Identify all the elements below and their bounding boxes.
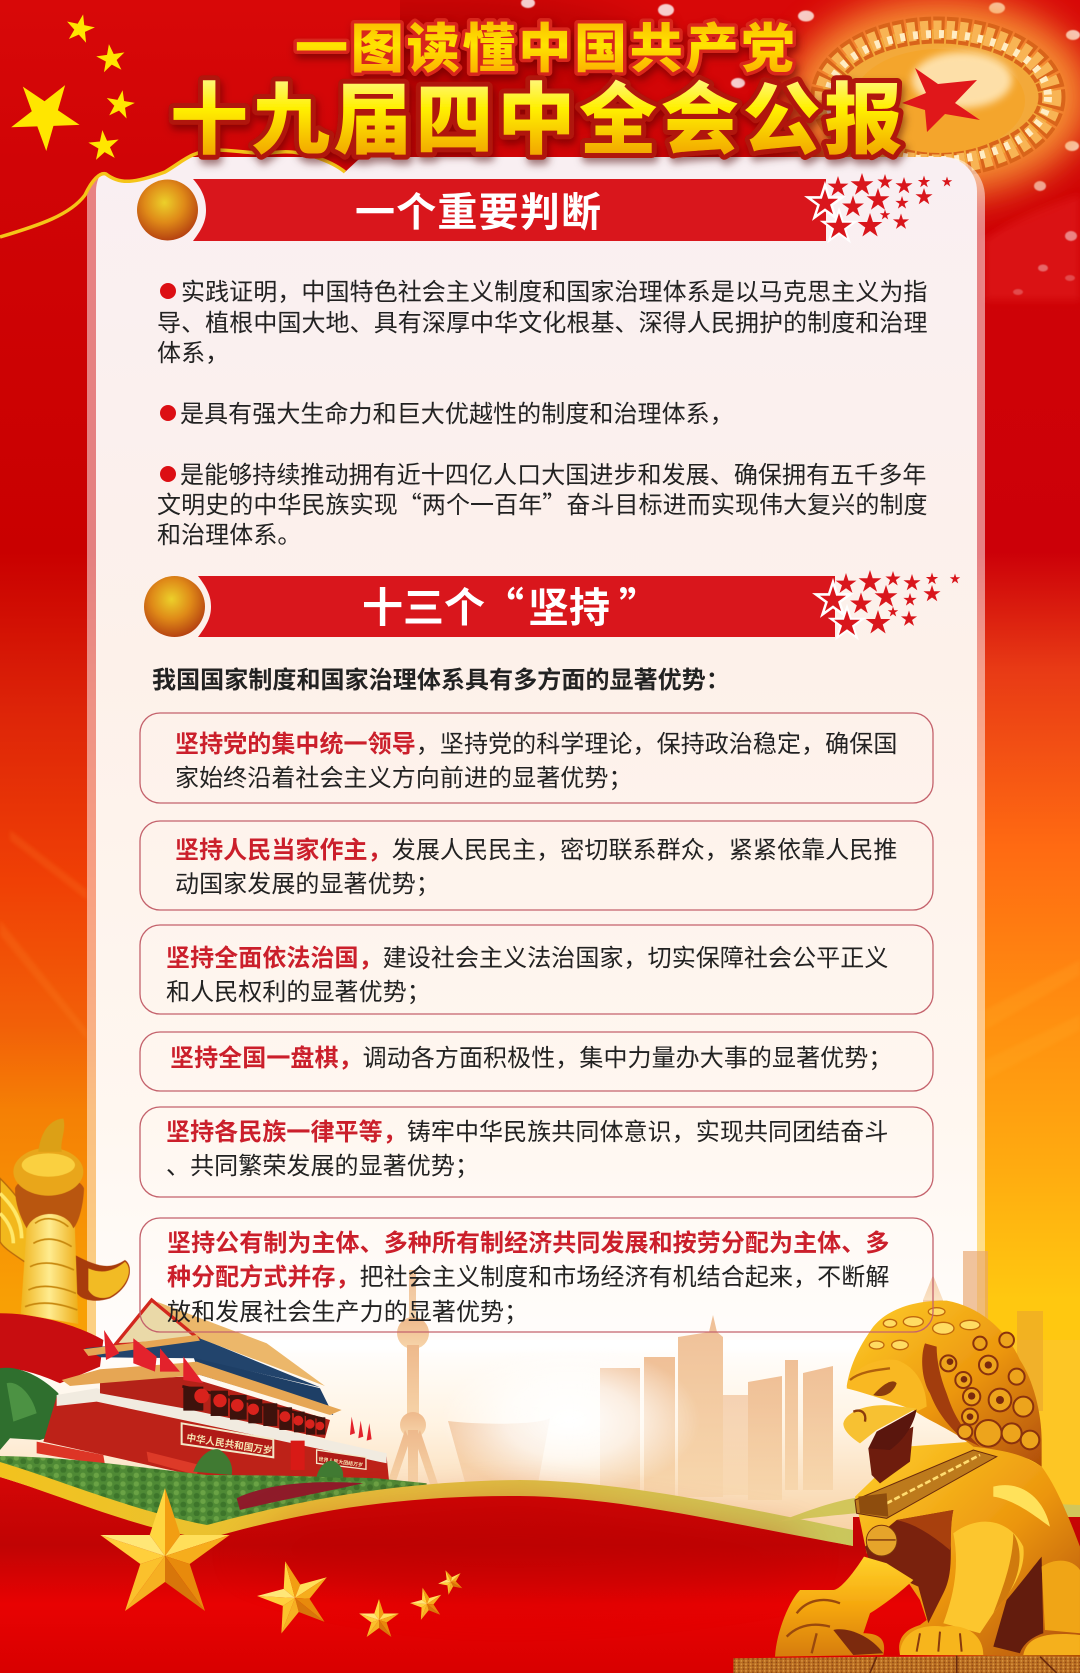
red wave ground with gold ribbon (0, 1462, 1080, 1673)
tv tower (385, 1270, 440, 1490)
text block: judgement paragraphs: 导、植根中国大地、具有深厚中华文化根基、深得人民拥护的制度和治理 (157, 303, 928, 338)
flags (104, 1330, 372, 1441)
icon: national emblem ring with red star (790, 0, 1080, 195)
city skyline silhouette (385, 1251, 1043, 1500)
card: ethnic equality: 、共同繁荣发展的显著优势； (166, 1146, 479, 1181)
card: people: 动国家发展的显著优势； (175, 864, 440, 899)
card: leadership (140, 713, 933, 803)
heading banner: 十三个坚持: 十三个 (362, 574, 485, 634)
card: public ownership: 放和发展社会生产力的显著优势； (167, 1292, 528, 1327)
upper roof (157, 1302, 325, 1386)
heading banner: 一个重要判断: 一个重要判断 (355, 180, 602, 238)
heading banner: 十三个坚持: ” (619, 574, 660, 634)
plinth (733, 1655, 1080, 1673)
gate hall (100, 1377, 330, 1438)
neck shadow (868, 1427, 913, 1483)
text block: judgement paragraphs: 是能够持续推动拥有近十四亿人口大国进步和发展、确保拥有五千多年 (180, 455, 926, 490)
card: rule of law: 和人民权利的显著优势； (166, 972, 431, 1007)
banner stars (808, 173, 952, 241)
gate wall (43, 1390, 389, 1483)
card: ethnic equality: 坚持各民族一律平等，铸牢中华民族共同体意识，实现共同团结奋斗 (166, 1112, 888, 1147)
bullet 1 (160, 283, 176, 299)
text block: judgement paragraphs: 是具有强大生命力和巨大优越性的制度和治理体系， (180, 394, 734, 429)
card: public ownership: 种分配方式并存，把社会主义制度和市场经济有机结合起来，不断解 (167, 1257, 889, 1292)
banner stars (816, 570, 960, 638)
mouth (868, 1409, 917, 1450)
card: leadership: 坚持党的集中统一领导，坚持党的科学理论，保持政治稳定，确保国 (175, 724, 897, 759)
trees (0, 1368, 62, 1450)
heading banner: 十三个坚持: 坚持 (528, 574, 610, 634)
subheading: 我国国家制度和国家治理体系具有多方面的显著优势： (152, 660, 730, 695)
icon: golden stone lion (733, 1301, 1080, 1673)
body (855, 1440, 1080, 1657)
card: people: 坚持人民当家作主，发展人民民主，密切联系群众，紧紧依靠人民推 (175, 830, 897, 865)
dark chest (865, 1510, 953, 1623)
heading banner: 一个重要判断 (137, 173, 952, 241)
card: people (140, 821, 933, 910)
card: public ownership (140, 1218, 933, 1332)
text block: judgement paragraphs: 实践证明，中国特色社会主义制度和国家治理体系是以马克思主义为指 (181, 272, 927, 307)
card: public ownership: 坚持公有制为主体、多种所有制经济共同发展和按劳分配为主体、多 (167, 1223, 889, 1258)
ground glow (0, 1340, 1080, 1530)
upper hall (85, 1337, 320, 1387)
text block: judgement paragraphs (157, 272, 928, 550)
blue beams and lower roof (193, 1357, 333, 1415)
slogan placards: 世界人民大团结万岁 (318, 1456, 363, 1469)
bullet 3 (160, 466, 176, 482)
slogan placards: 中华人民共和国万岁 (186, 1430, 274, 1457)
near leg highlight (943, 1522, 1024, 1633)
card: nationwide coordination: 坚持全国一盘棋，调动各方面积极性，集中力量办大事的显著优势； (170, 1038, 892, 1073)
flag with five yellow stars (0, 0, 400, 237)
text block: judgement paragraphs: 和治理体系。 (157, 515, 301, 550)
collar (855, 1450, 997, 1518)
fore leg and paw (775, 1557, 913, 1657)
panel: white content card (87, 157, 985, 1437)
decorative white dots (521, 0, 1080, 295)
slogan placards (182, 1423, 366, 1470)
card: rule of law: 坚持全面依法治国，建设社会主义法治国家，切实保障社会公平正义 (166, 938, 888, 973)
title (170, 7, 906, 170)
bullet 2 (160, 405, 176, 421)
muzzle (843, 1405, 917, 1443)
icon: huabiao column (0, 1118, 130, 1324)
gold stars (100, 1488, 467, 1637)
face (847, 1359, 927, 1412)
mane (847, 1301, 1042, 1467)
icon: Tiananmen gate (0, 1300, 427, 1533)
sun glow (440, 1345, 700, 1495)
title line 1: 一图读懂中国共产党 (295, 7, 797, 83)
text block: judgement paragraphs: 体系， (157, 333, 229, 368)
card: rule of law (140, 925, 933, 1014)
text block: judgement paragraphs: 文明史的中华民族实现“两个一百年”奋斗目标进而实现伟大复兴的制度 (157, 485, 928, 520)
card: nationwide coordination (140, 1032, 933, 1091)
card: leadership: 家始终沿着社会主义方向前进的显著优势； (175, 758, 633, 793)
title line 2: 十九届四中全会公报 (170, 58, 906, 170)
icon: gold sphere (137, 180, 198, 240)
icon: gold sphere (144, 576, 205, 637)
card: ethnic equality (140, 1107, 933, 1197)
heading banner: 十三个坚持: “ (483, 574, 524, 634)
hedges (0, 1449, 427, 1533)
heading banner: 十三个坚持 (144, 570, 960, 638)
rear shadow (993, 1557, 1043, 1653)
red ribbon behind gate (0, 1313, 103, 1383)
